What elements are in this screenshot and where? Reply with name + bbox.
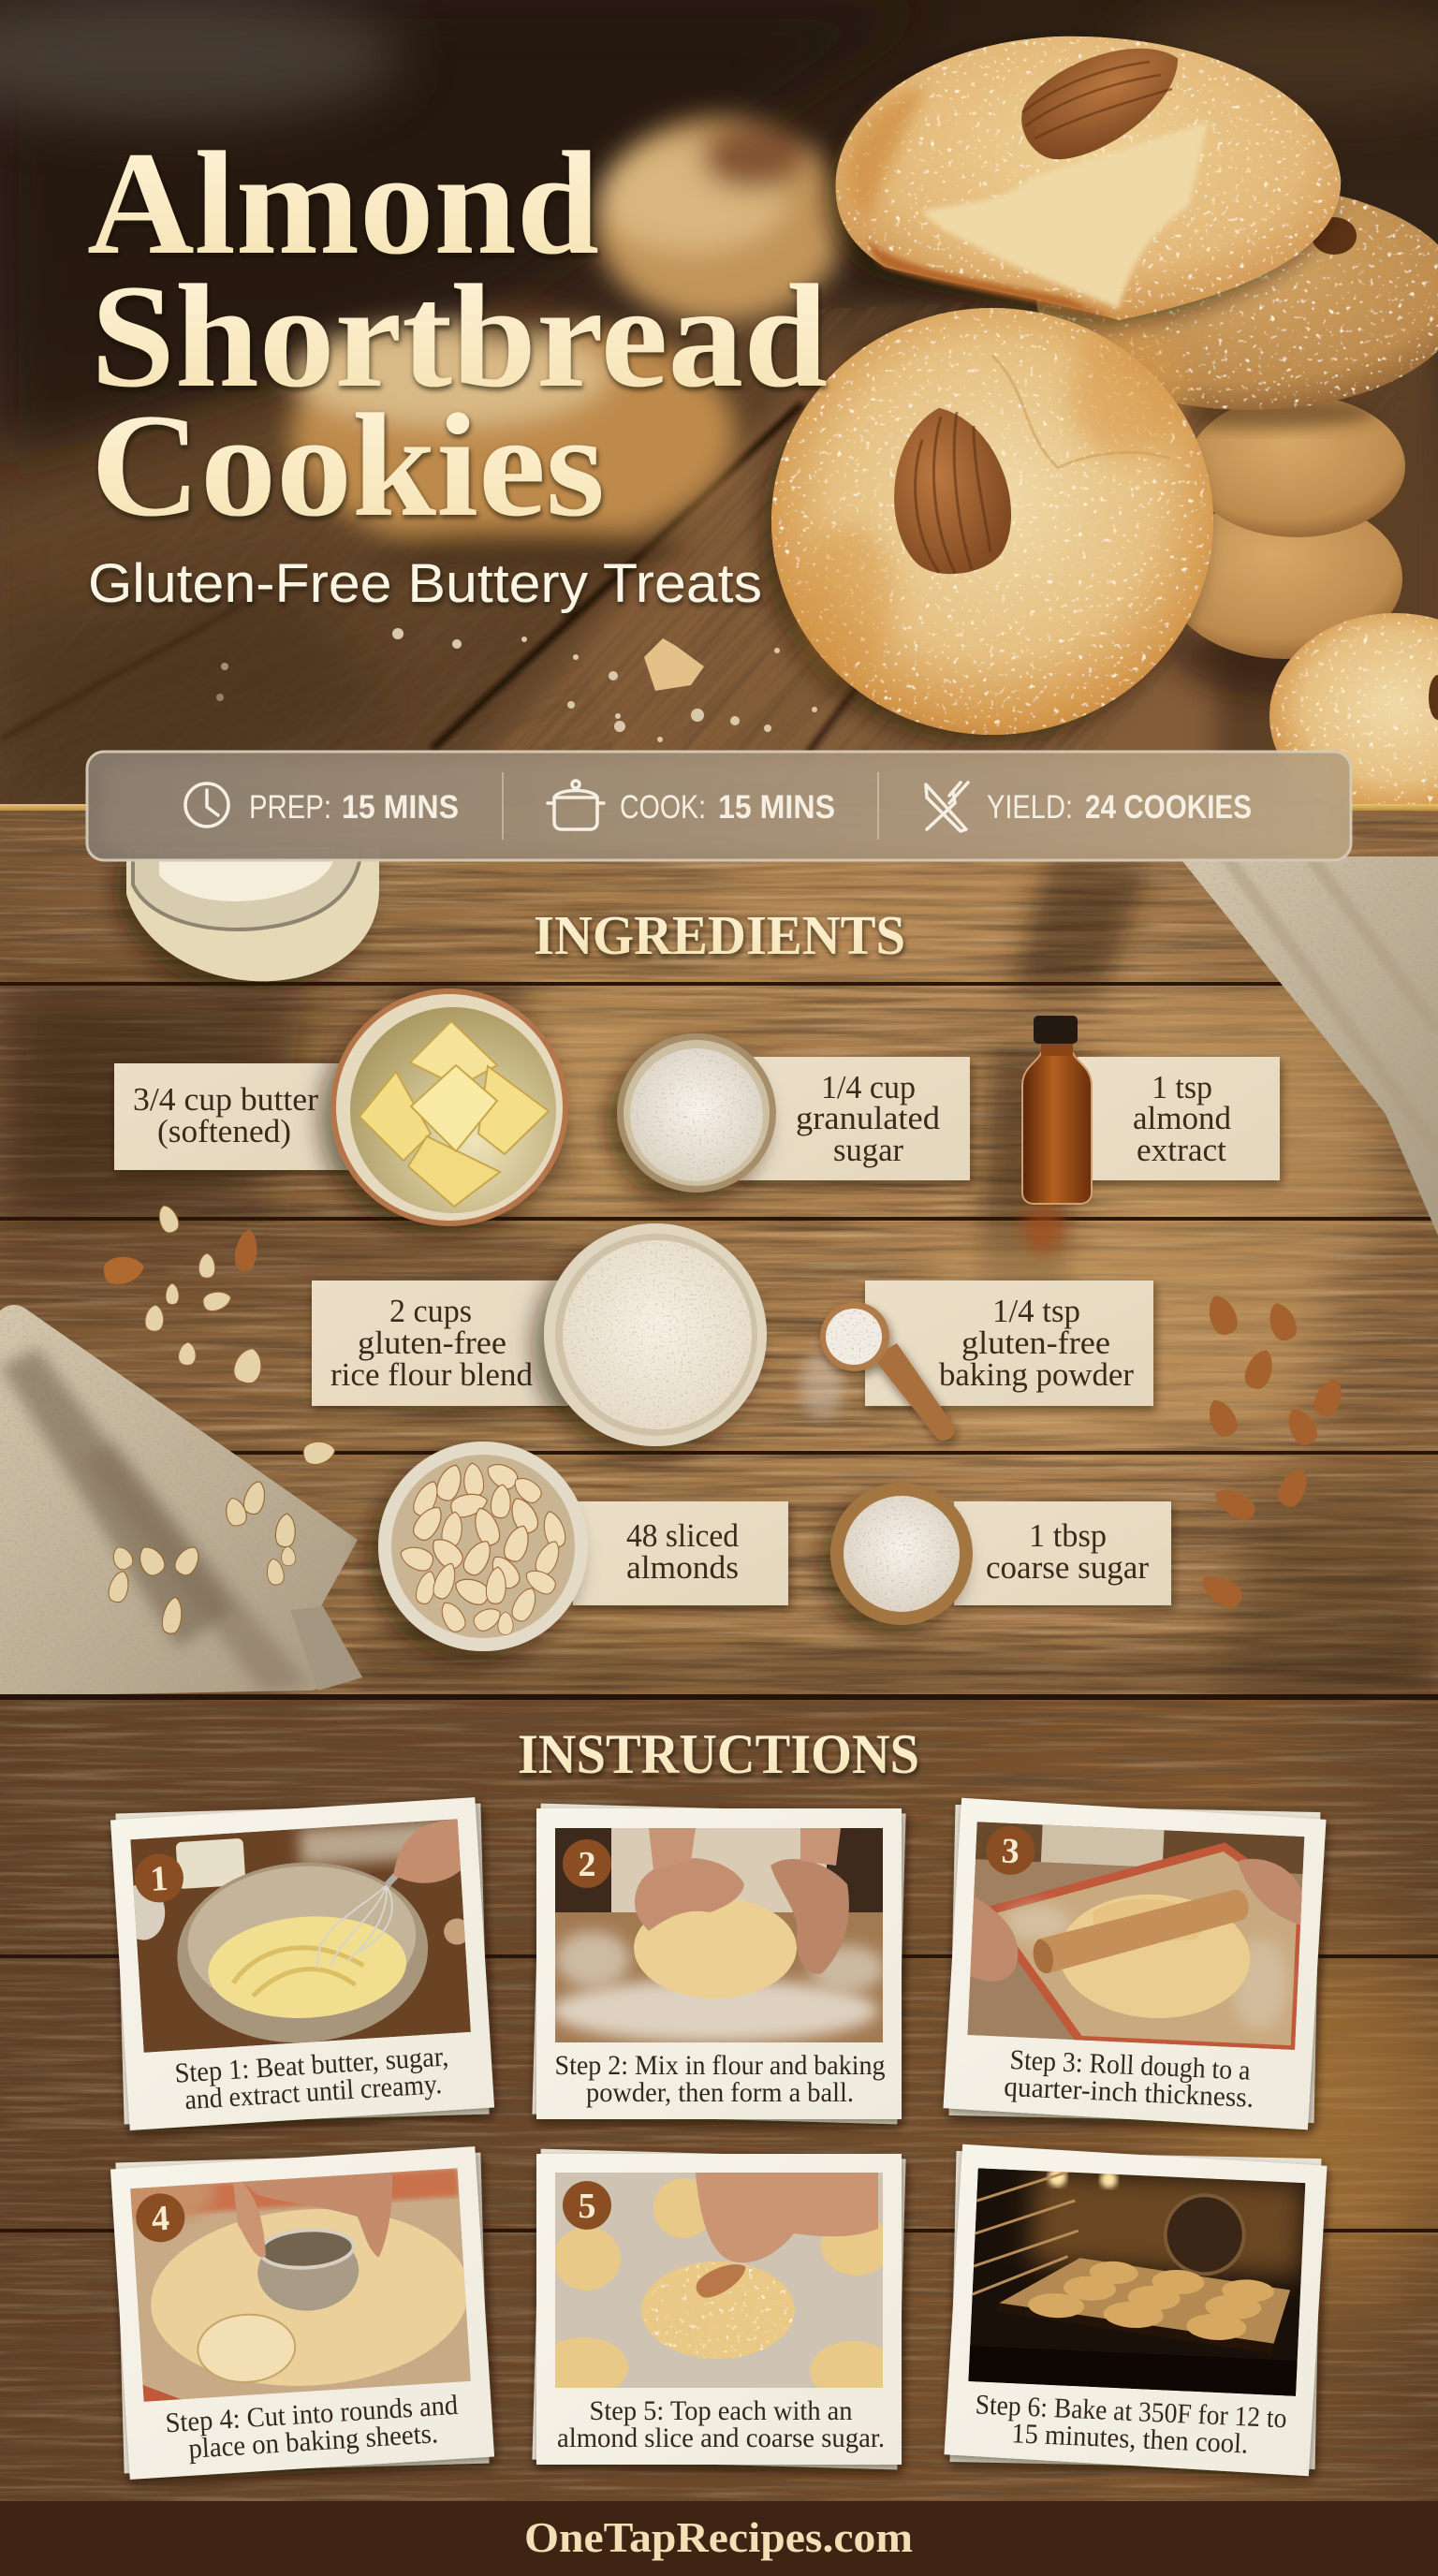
title: Almond <box>87 122 599 285</box>
step 6 caption: Step 6: Bake at 350F for 12 to <box>975 2389 1287 2434</box>
ingredient: granulated sugar <box>617 1033 970 1193</box>
label: butter <box>114 1063 348 1170</box>
ingredient: butter <box>114 988 568 1226</box>
measuring spoon <box>820 1302 955 1441</box>
step 1 caption <box>174 2041 451 2116</box>
step 4 card <box>101 2140 500 2486</box>
badge 5 <box>563 2181 611 2230</box>
wood planks instructions <box>0 1694 1438 2501</box>
website: OneTapRecipes.com <box>524 2513 913 2561</box>
label: almond extract: almond <box>1133 1100 1231 1136</box>
label: granulated sugar <box>740 1057 970 1180</box>
label: baking powder <box>865 1281 1153 1406</box>
label: granulated sugar: 1/4 cup <box>821 1069 916 1105</box>
step 4 caption: Step 4: Cut into rounds and <box>165 2390 459 2438</box>
label: flour: 2 cups <box>389 1293 472 1329</box>
title: Cookies <box>91 384 605 548</box>
step 3 caption <box>1004 2044 1255 2114</box>
sugar crystals on table <box>216 628 817 742</box>
label: almond extract <box>1078 1057 1280 1180</box>
badge 1 <box>133 1852 185 1904</box>
step 3 photo <box>968 1822 1305 2050</box>
step 6 photo: oven <box>968 2168 1305 2396</box>
napkin bottom left <box>0 1305 362 1696</box>
footer <box>0 2501 1438 2576</box>
scattered almond slices <box>106 1203 337 1635</box>
label: flour: gluten-free <box>358 1325 506 1361</box>
badge 4 <box>135 2192 186 2244</box>
label: baking powder: baking powder <box>939 1356 1134 1393</box>
blurred cookies background <box>290 117 847 566</box>
hero wood table <box>0 0 1438 803</box>
stat: cook: 15 MINS <box>718 789 835 826</box>
middle stacked cookie <box>1188 395 1405 537</box>
label: sliced almonds <box>573 1501 788 1605</box>
ingredient: almond extract <box>1022 1016 1280 1254</box>
step 3 caption: quarter-inch thickness. <box>1004 2071 1255 2114</box>
stat: yield: 24 COOKIES <box>1085 789 1252 826</box>
bottom right cookie <box>1269 613 1438 819</box>
stat: yield <box>987 789 1252 826</box>
step 2 caption: Step 2: Mix in flour and baking <box>554 2050 886 2081</box>
spilled powder <box>800 1352 844 1419</box>
label: almond extract: extract <box>1137 1132 1226 1168</box>
stats bar <box>87 752 1351 860</box>
badge 4: 4 <box>151 2199 170 2239</box>
wood planks ingredients <box>0 807 1438 1696</box>
hero panel <box>0 0 1438 804</box>
title <box>87 122 828 548</box>
stat: prep: PREP: <box>249 789 331 826</box>
napkin top right <box>1179 856 1438 1236</box>
icon: clock <box>185 783 228 827</box>
front big cookie <box>771 308 1213 735</box>
icon: pot <box>548 781 604 829</box>
step 2 photo <box>555 1828 883 2042</box>
stat: prep: 15 MINS <box>342 789 459 826</box>
label: sliced almonds: almonds <box>626 1549 739 1586</box>
cookie stack behind <box>1036 185 1438 697</box>
ingredient: coarse sugar <box>830 1483 1171 1625</box>
label: flour <box>312 1281 568 1406</box>
ingredient: sliced almonds <box>378 1442 788 1651</box>
label: baking powder: gluten-free <box>961 1325 1110 1361</box>
step 1 card <box>105 1791 500 2137</box>
label: sliced almonds: 48 sliced <box>626 1517 739 1554</box>
label: flour: rice flour blend <box>330 1356 533 1393</box>
step 1 caption: Step 1: Beat butter, sugar, <box>174 2041 449 2089</box>
step 4 photo <box>130 2168 471 2402</box>
subtitle: Gluten-Free Buttery Treats <box>88 553 762 614</box>
step 5 photo <box>555 2173 883 2388</box>
badge 5: 5 <box>579 2187 595 2226</box>
bowl of butter cubes <box>330 988 568 1226</box>
step 6 card <box>942 2142 1329 2479</box>
almond on top cookie <box>1021 49 1178 159</box>
bowl of flour <box>544 1223 767 1446</box>
bowl of sliced almonds <box>378 1442 588 1651</box>
label: coarse sugar: 1 tbsp <box>1029 1517 1107 1554</box>
milk jar <box>126 847 379 981</box>
gold divider left <box>0 804 94 811</box>
stat: cook: COOK: <box>620 789 706 826</box>
ingredients heading: INGREDIENTS <box>534 904 905 966</box>
step 1 photo <box>130 1819 471 2053</box>
step 5 card <box>532 2149 906 2469</box>
badge 1: 1 <box>149 1859 169 1899</box>
step 3 caption: Step 3: Roll dough to a <box>1009 2044 1251 2086</box>
label: baking powder: 1/4 tsp <box>992 1293 1080 1329</box>
label: butter: 3/4 cup butter <box>133 1081 318 1118</box>
instructions heading: INSTRUCTIONS <box>518 1723 919 1785</box>
cookie crumb <box>644 638 704 691</box>
step 4 caption: place on baking sheets. <box>187 2418 439 2465</box>
label: almond extract: 1 tsp <box>1152 1069 1212 1105</box>
step 6 caption <box>974 2389 1287 2461</box>
badge 3 <box>985 1825 1036 1876</box>
ingredient: baking powder <box>800 1281 1153 1441</box>
step 5 caption <box>557 2395 885 2453</box>
label: butter: (softened) <box>157 1113 291 1149</box>
bitten top cookie <box>836 37 1341 320</box>
step 4 caption <box>165 2390 461 2466</box>
whole almonds <box>102 1228 1348 1612</box>
ingredients panel <box>0 807 1438 1696</box>
bowl of sugar <box>617 1033 776 1193</box>
badge 2 <box>563 1839 611 1888</box>
gold divider right <box>1346 804 1438 811</box>
label: coarse sugar: coarse sugar <box>986 1549 1149 1586</box>
upper stacked cookie <box>1036 185 1438 410</box>
step 3 card <box>941 1795 1328 2132</box>
badge 2: 2 <box>579 1845 595 1884</box>
step 5 caption: Step 5: Top each with an <box>590 2395 852 2426</box>
stat: yield: YIELD: <box>987 789 1073 826</box>
title: Shortbread <box>91 255 828 418</box>
step 2 card <box>532 1804 906 2124</box>
stat: cook <box>620 789 835 826</box>
label: granulated sugar: granulated <box>796 1100 941 1136</box>
label: coarse sugar <box>954 1501 1171 1605</box>
label: granulated sugar: sugar <box>833 1132 903 1168</box>
amber bottle <box>1022 1016 1092 1254</box>
step 6 caption: 15 minutes, then cool. <box>1011 2418 1249 2460</box>
icon: fork and knife <box>926 783 968 831</box>
step 1 caption: and extract until creamy. <box>183 2069 443 2115</box>
instructions panel <box>0 1694 1438 2501</box>
stat: prep <box>249 789 459 826</box>
badge 3: 3 <box>1001 1831 1020 1871</box>
step 2 caption <box>554 2050 886 2108</box>
almond on front cookie <box>882 400 1020 581</box>
ingredient: rice flour blend <box>312 1223 767 1446</box>
step 5 caption: almond slice and coarse sugar. <box>557 2422 885 2453</box>
step 2 caption: powder, then form a ball. <box>586 2077 854 2108</box>
lower stacked cookie <box>1187 513 1402 659</box>
bowl of coarse sugar <box>830 1483 973 1625</box>
